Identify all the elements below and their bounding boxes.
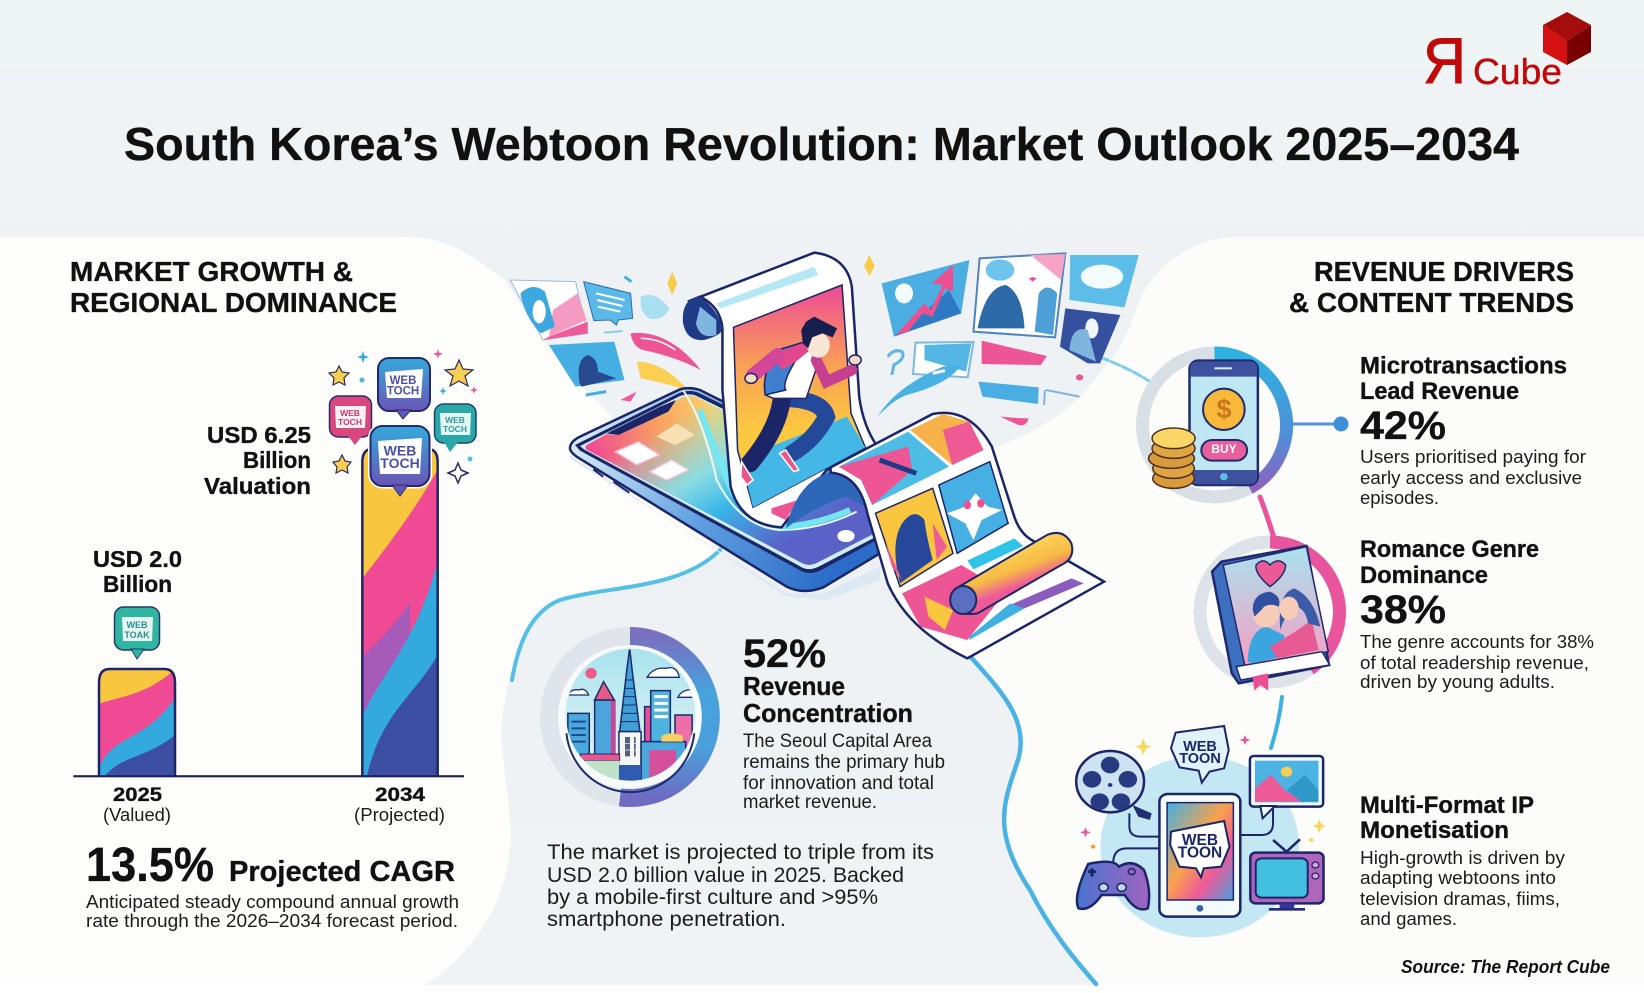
text: market tripling paragraph [547, 841, 934, 931]
label: USD 6.25 billion valuation: Valuation [204, 473, 311, 499]
label: USD 2.0 billion: USD 2.0 [93, 546, 182, 572]
icon: small green bubble [114, 607, 160, 659]
heading: market growth: REGIONAL DOMINANCE [70, 287, 397, 318]
icon: teal bubble [434, 404, 476, 452]
text: 52% revenue concentration: Revenue [743, 671, 845, 701]
phone [570, 388, 880, 600]
icon: phone with coins: $ [1216, 394, 1232, 424]
stat: revenue concentration donut [549, 632, 945, 813]
gamepad [1077, 862, 1149, 909]
labels: chart axis years: 2034 [375, 784, 425, 806]
text: 52% revenue concentration: The Seoul Capital Area [743, 731, 932, 752]
text: 38% romance genre: of total readership revenue, [1360, 652, 1589, 673]
text: multi-format monetisation [1360, 792, 1566, 929]
logo: RCube: Я [1423, 24, 1466, 97]
text: 52% revenue concentration: Concentration [743, 698, 913, 728]
icon: red cube [1543, 12, 1591, 65]
labels: chart axis years: (Valued) [103, 804, 171, 825]
bar 2034 [360, 447, 440, 778]
text: market tripling paragraph: USD 2.0 billion value in 2025. Backed [547, 864, 904, 887]
stat: 13.5% projected CAGR [86, 839, 459, 931]
text: market tripling paragraph: The market is projected to triple from its [547, 841, 934, 864]
text: multi-format monetisation: High-growth is driven by [1360, 847, 1566, 868]
heading: market growth [70, 256, 397, 318]
text: 38% romance genre [1360, 536, 1594, 692]
text: multi-format monetisation: Monetisation [1360, 817, 1509, 844]
title: South Korea’s Webtoon Revolution: Market Outlook 2025–2034 [124, 118, 1519, 170]
text: 42% microtransactions: early access and exclusive [1360, 467, 1582, 488]
heading: revenue drivers: REVENUE DRIVERS [1314, 256, 1574, 287]
label: USD 6.25 billion valuation: Billion [243, 447, 311, 473]
icon: small green bubble: WEB [126, 620, 148, 630]
comic panels fan, right [864, 253, 1139, 425]
icon: phone with coins: BUY [1211, 442, 1237, 456]
text: multi-format monetisation: adapting webtoons into [1360, 867, 1556, 888]
panel: left market growth [0, 237, 720, 985]
icon: teal bubble: TOCH [443, 424, 467, 434]
text: 52% revenue concentration: remains the primary hub [743, 752, 945, 773]
icon: multi-format hub: WEB [1182, 832, 1218, 849]
text: 38% romance genre: Romance Genre [1360, 536, 1539, 563]
icon: main bubble on bar: TOCH [380, 455, 420, 471]
icon: top bubble: WEB [390, 375, 416, 387]
text: 42% microtransactions: episodes. [1360, 487, 1439, 508]
text: 52% revenue concentration: for innovation and total [743, 773, 934, 794]
text: 52% revenue concentration: market revenue. [743, 792, 877, 813]
text: 38% romance genre: driven by young adults. [1360, 671, 1555, 692]
label: USD 2.0 billion: Billion [103, 571, 172, 597]
icon: pink bubble: TOCH [338, 417, 362, 427]
text: multi-format monetisation: television dramas, fiims, [1360, 888, 1560, 909]
label: USD 6.25 billion valuation [204, 422, 311, 499]
icon: top bubble [378, 358, 430, 419]
icon: city skyline [565, 648, 696, 792]
icon: main bubble on bar: WEB [384, 442, 416, 458]
icon: small green bubble: TOAK [124, 630, 150, 640]
icon: pink bubble [330, 396, 372, 445]
heading: revenue drivers: & CONTENT TRENDS [1289, 287, 1574, 318]
driver: multi-format IP [1076, 726, 1566, 937]
icon: multi-format hub: TOON [1179, 751, 1221, 767]
stat: 13.5% projected CAGR: 13.5% [86, 839, 214, 892]
top speech bubble [1171, 726, 1229, 783]
label: USD 6.25 billion valuation: USD 6.25 [207, 422, 311, 448]
comic art panel [733, 285, 865, 520]
icon: teal bubble: WEB [445, 415, 465, 425]
source credit: Source: The Report Cube [1401, 957, 1610, 977]
icons: stars and sparkles [329, 349, 478, 483]
text: 52% revenue concentration: 52% [743, 632, 826, 676]
labels: chart axis years: (Projected) [354, 804, 445, 825]
text: 42% microtransactions: Microtransactions [1360, 352, 1567, 380]
panel: right revenue drivers [950, 237, 1644, 985]
bar chart: market size 2025 vs 2034 [73, 349, 478, 825]
heading: revenue drivers [1289, 256, 1574, 318]
stat: 13.5% projected CAGR: Anticipated steady compound annual growth [86, 891, 459, 912]
text: 38% romance genre: The genre accounts for 38% [1360, 631, 1594, 652]
text: 42% microtransactions: Users prioritised paying for [1360, 446, 1586, 467]
labels: chart axis years [103, 784, 445, 825]
bar 2025 [97, 666, 177, 778]
donut ring [549, 636, 711, 798]
icon: multi-format hub [1076, 726, 1326, 937]
logo: RCube [1423, 12, 1591, 97]
icon: multi-format hub: TOON [1178, 844, 1222, 862]
icon: multi-format hub: WEB [1183, 739, 1217, 755]
icon: top bubble: TOCH [387, 386, 419, 398]
icon: main bubble on bar [370, 426, 430, 496]
comic panels fan, left [510, 272, 701, 402]
tablet [1159, 794, 1240, 917]
television [1250, 839, 1324, 911]
illustration: phone with webtoon scroll [510, 253, 1139, 658]
ribbon sheet with comic panels [786, 413, 1104, 658]
text: 38% romance genre: Dominance [1360, 562, 1488, 589]
text: 52% revenue concentration [743, 632, 945, 813]
text: 42% microtransactions: Lead Revenue [1360, 378, 1519, 405]
connector: line and dot [1293, 416, 1348, 432]
heading: market growth: MARKET GROWTH & [70, 256, 353, 287]
text: multi-format monetisation: and games. [1360, 908, 1457, 929]
driver: romance genre [1200, 536, 1594, 692]
stat: 13.5% projected CAGR: rate through the 2026–2034 forecast period. [86, 910, 458, 931]
icon: romance book [1200, 542, 1340, 691]
label: USD 2.0 billion [93, 546, 182, 597]
film reel [1076, 751, 1152, 820]
connector: blue flow lines [512, 357, 1282, 984]
icon: phone with coins [1142, 353, 1287, 497]
runner figure [741, 317, 861, 485]
text: market tripling paragraph: smartphone penetration. [547, 908, 786, 931]
text: multi-format monetisation: Multi-Format IP [1360, 792, 1534, 819]
text: 38% romance genre: 38% [1360, 588, 1446, 632]
text: 42% microtransactions: 42% [1360, 404, 1446, 448]
image bubble [1250, 756, 1323, 818]
logo: RCube: Cube [1473, 51, 1562, 92]
stat: 13.5% projected CAGR: Projected CAGR [229, 856, 455, 888]
sparkles [1080, 735, 1326, 849]
icon: pink bubble: WEB [340, 408, 360, 418]
text: market tripling paragraph: by a mobile-first culture and >95% [547, 886, 878, 909]
labels: chart axis years: 2025 [113, 784, 162, 806]
text: 42% microtransactions [1360, 352, 1586, 508]
scroll sheet with runner [683, 253, 878, 527]
driver: microtransactions [1142, 352, 1586, 508]
